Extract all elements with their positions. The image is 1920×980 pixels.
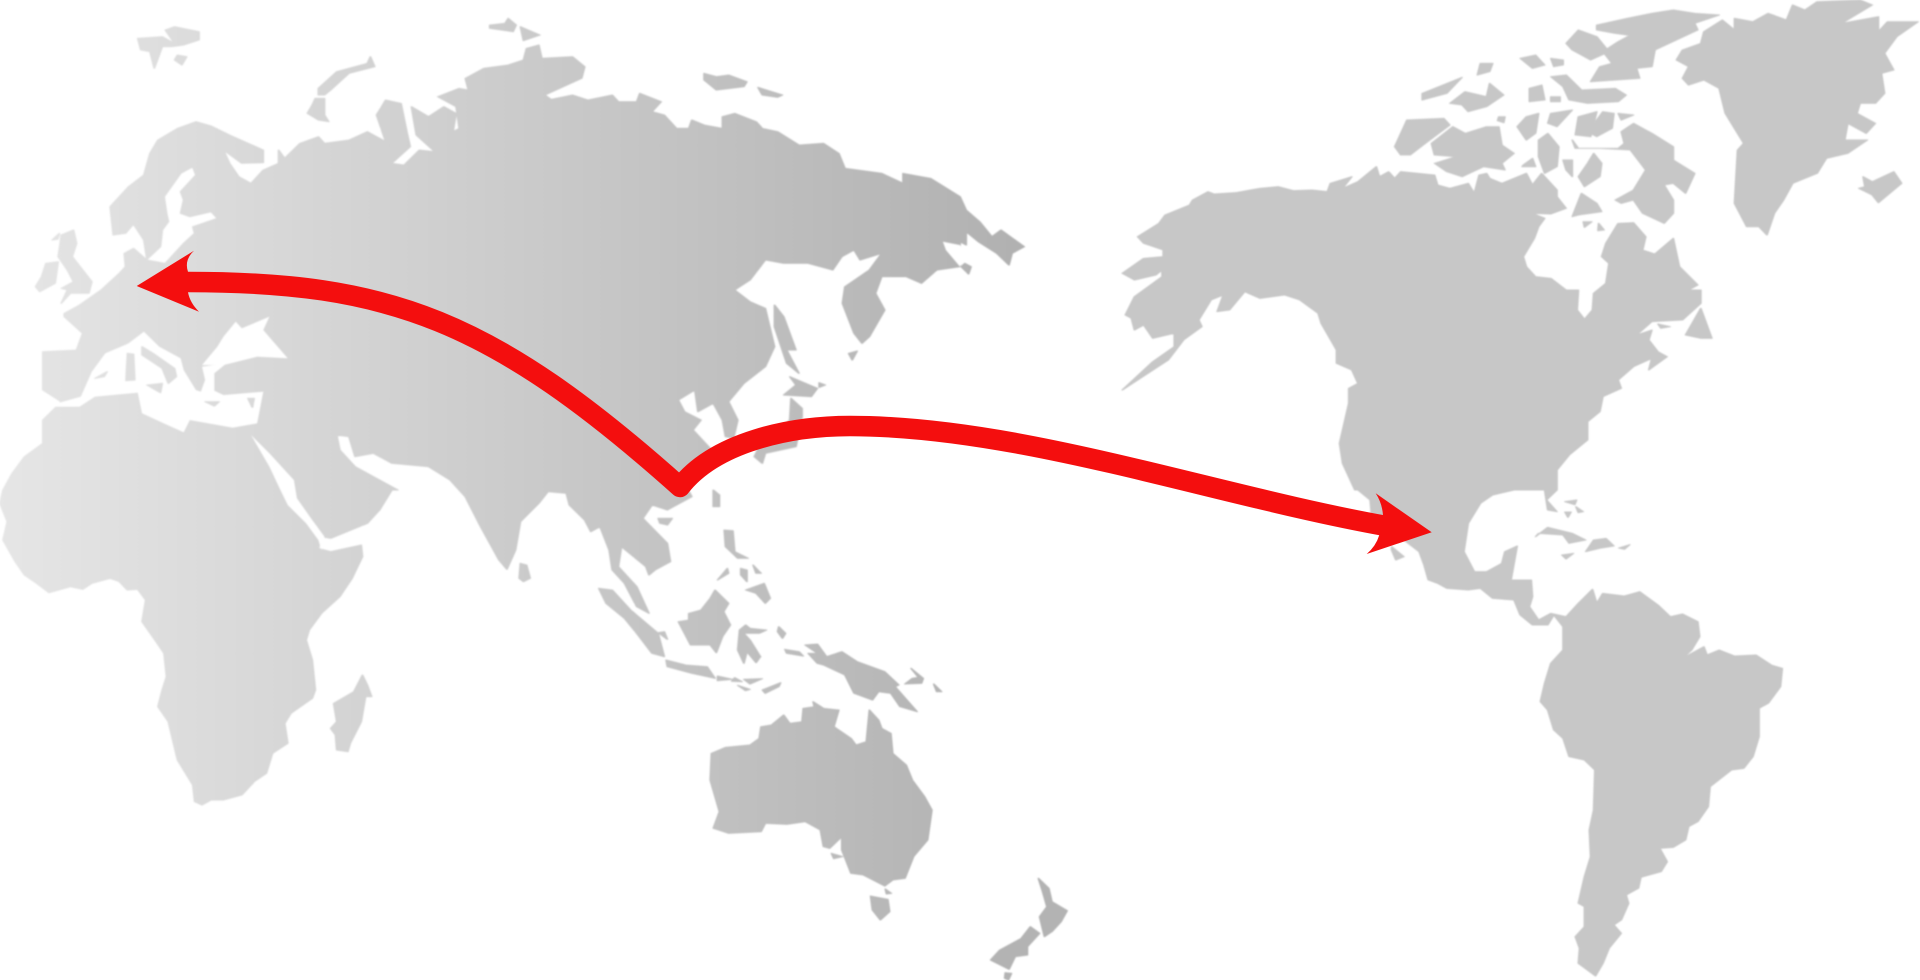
map: Canadian Arctic islands xyxy=(1395,10,1719,231)
map: Mediterranean peninsulas and islands xyxy=(95,347,254,407)
map: Eurasia and Africa xyxy=(0,45,1024,805)
map: northern Eurasian islands xyxy=(36,18,971,463)
map: South-East Asian islands xyxy=(331,490,803,752)
arrowhead: Europe xyxy=(137,251,199,312)
map: New Guinea, Australia and Pacific islands xyxy=(710,644,942,920)
map: Caribbean islands xyxy=(1536,500,1630,559)
map: Greenland and Iceland xyxy=(1676,0,1918,235)
arrow shafts meeting at the origin point xyxy=(188,282,1386,526)
map: New Zealand xyxy=(991,878,1067,980)
map: North and South America xyxy=(1122,167,1782,976)
arrowhead: the Americas xyxy=(1367,493,1432,554)
map: inland seas xyxy=(52,242,966,550)
